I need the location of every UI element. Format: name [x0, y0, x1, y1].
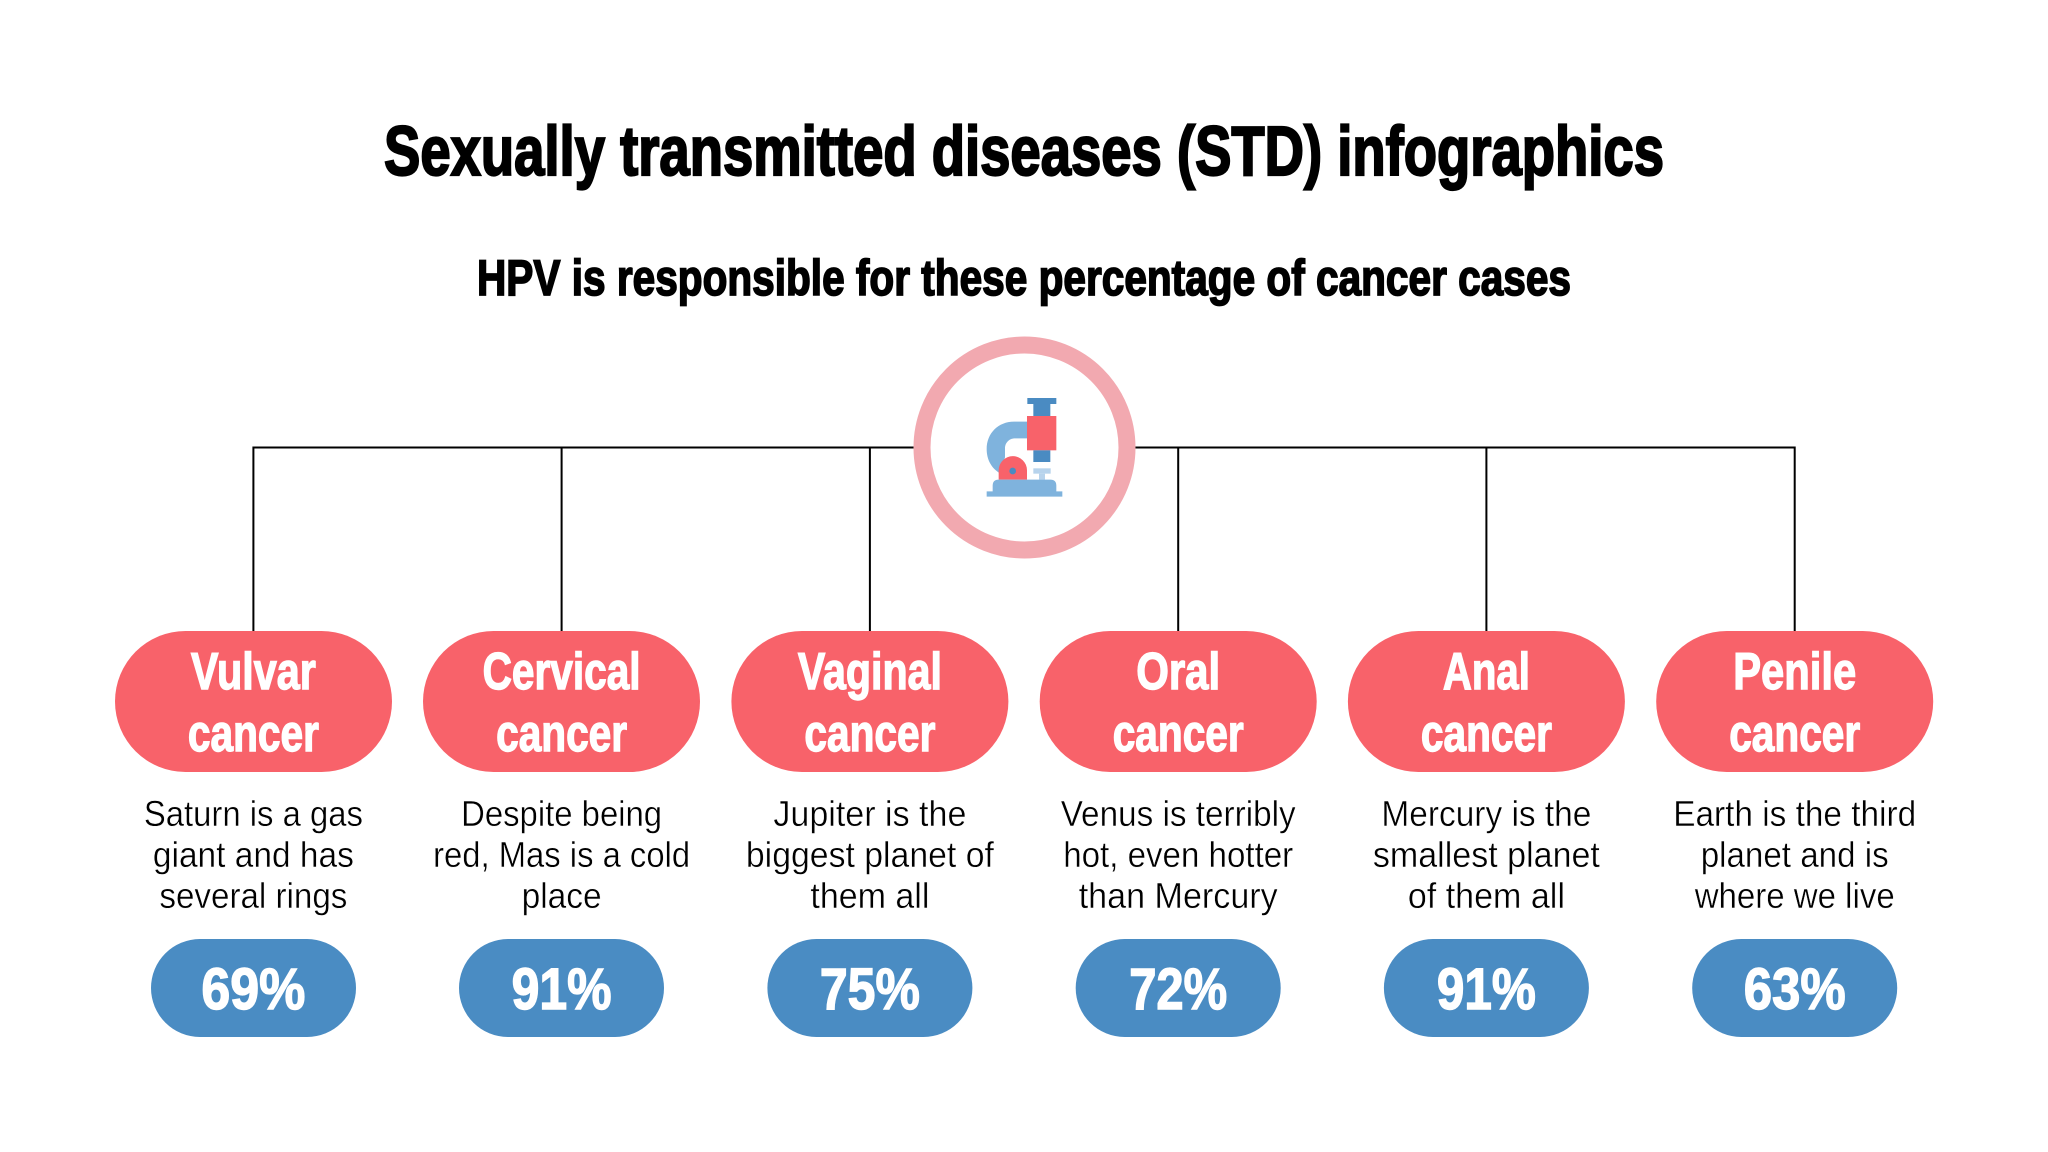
percentage pill: [1076, 939, 1281, 1037]
description: biggest planet of: [746, 834, 995, 875]
description: red, Mas is a cold: [433, 834, 690, 875]
description: [433, 793, 690, 916]
percentage pill: [1384, 939, 1589, 1037]
description: smallest planet: [1373, 834, 1600, 875]
percentage pill: 69%: [201, 957, 305, 1022]
percentage pill: 63%: [1744, 957, 1846, 1022]
percentage pill: [459, 939, 664, 1037]
description: Despite being: [461, 793, 662, 834]
label pill: cancer: [188, 705, 319, 763]
label pill: Cervical: [483, 643, 641, 701]
description: planet and is: [1701, 834, 1889, 875]
label pill: [1040, 631, 1317, 772]
description: [144, 793, 363, 916]
percentage pill: [767, 939, 972, 1037]
description: giant and has: [153, 834, 354, 875]
label pill: [423, 631, 700, 772]
description: than Mercury: [1079, 875, 1278, 916]
description: [746, 793, 995, 916]
central microscope badge: [922, 345, 1127, 550]
percentage pill: [1692, 939, 1897, 1037]
label pill: cancer: [1113, 705, 1244, 763]
description: Earth is the third: [1673, 793, 1916, 834]
percentage pill: 72%: [1129, 957, 1227, 1022]
description: where we live: [1694, 875, 1895, 916]
percentage pill: [151, 939, 356, 1037]
description: [1061, 793, 1296, 916]
description: Venus is terribly: [1061, 793, 1296, 834]
label pill: cancer: [804, 705, 935, 763]
description: Jupiter is the: [773, 793, 966, 834]
label pill: Penile: [1733, 643, 1856, 701]
percentage pill: 91%: [512, 957, 612, 1022]
column: Vulvar cancer: [115, 631, 392, 1037]
badge ring: [922, 345, 1127, 550]
description: them all: [810, 875, 929, 916]
connector tree lines: [253, 448, 1795, 632]
label pill: Anal: [1443, 643, 1530, 701]
label pill: cancer: [1421, 705, 1552, 763]
description: [1673, 793, 1916, 916]
label pill: [1348, 631, 1625, 772]
description: hot, even hotter: [1063, 834, 1293, 875]
description: of them all: [1408, 875, 1565, 916]
column: Oral cancer: [1040, 631, 1317, 1037]
description: place: [522, 875, 602, 916]
column: Vaginal cancer: [731, 631, 1008, 1037]
label pill: cancer: [496, 705, 627, 763]
description: [1373, 793, 1600, 916]
icon: microscope: [987, 398, 1062, 497]
label pill: cancer: [1729, 705, 1860, 763]
description: Saturn is a gas: [144, 793, 363, 834]
label pill: Vaginal: [798, 643, 942, 701]
column: Anal cancer: [1348, 631, 1625, 1037]
percentage pill: 91%: [1437, 957, 1536, 1022]
title: Sexually transmitted diseases (STD) infographics: [384, 112, 1664, 190]
label pill: [1656, 631, 1933, 772]
percentage pill: 75%: [820, 957, 920, 1022]
label pill: Oral: [1136, 643, 1220, 701]
subtitle: HPV is responsible for these percentage of cancer cases: [477, 250, 1571, 306]
description: several rings: [159, 875, 347, 916]
column: Penile cancer: [1656, 631, 1933, 1037]
label pill: [731, 631, 1008, 772]
label pill: Vulvar: [191, 643, 316, 701]
label pill: [115, 631, 392, 772]
column: Cervical cancer: [423, 631, 700, 1037]
description: Mercury is the: [1381, 793, 1591, 834]
